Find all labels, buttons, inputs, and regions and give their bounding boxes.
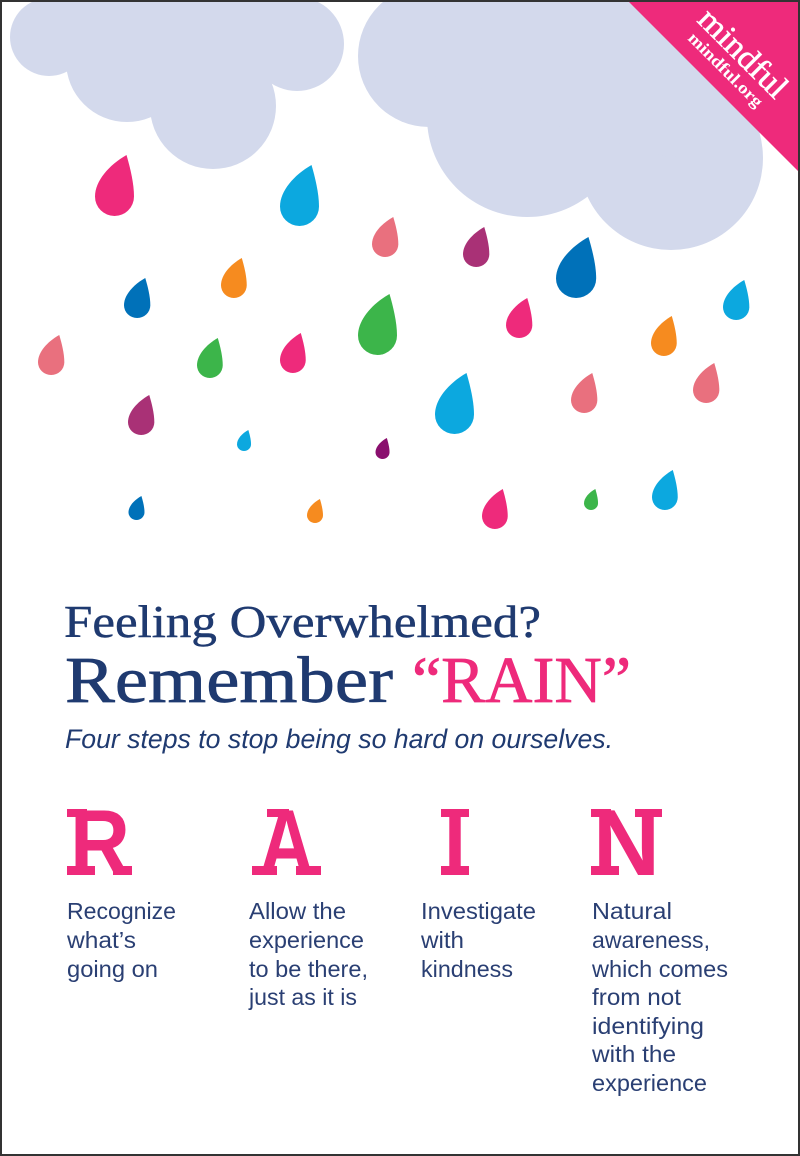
step I bbox=[420, 790, 536, 982]
letter A: A bbox=[259, 790, 314, 895]
text N: experience bbox=[592, 1070, 707, 1096]
text N: awareness, bbox=[592, 927, 710, 953]
text N: which comes bbox=[591, 956, 728, 982]
drop: cyan small bbox=[237, 430, 251, 451]
drop: cyan bbox=[723, 280, 749, 320]
step N bbox=[591, 790, 728, 1096]
banner url: mindful.org bbox=[684, 28, 767, 112]
drop: cyan large bbox=[435, 373, 474, 434]
heading line 2: Remember bbox=[65, 644, 393, 717]
drop: pink bbox=[280, 333, 306, 373]
text A: to be there, bbox=[249, 956, 368, 982]
text I: kindness bbox=[421, 956, 513, 982]
drop: plum bbox=[463, 227, 489, 267]
drop: pink large bbox=[95, 155, 134, 216]
drop: blue large bbox=[556, 237, 596, 298]
text R: Recognize bbox=[67, 898, 176, 924]
step A bbox=[248, 790, 368, 1010]
drop: pink bbox=[482, 489, 508, 529]
drop: salmon bbox=[372, 217, 398, 257]
drop: cyan large bbox=[280, 165, 319, 226]
text R: going on bbox=[67, 956, 158, 982]
text A: experience bbox=[249, 927, 364, 953]
raindrops bbox=[38, 155, 749, 529]
letter R: R bbox=[70, 790, 130, 895]
drop: salmon bbox=[38, 335, 64, 375]
letter N: N bbox=[593, 790, 660, 895]
text R: what’s bbox=[66, 927, 136, 953]
drop: orange bbox=[221, 258, 247, 298]
text I: Investigate bbox=[421, 898, 536, 924]
banner logo: mindful bbox=[690, 1, 795, 106]
drop: salmon bbox=[571, 373, 597, 413]
step R bbox=[66, 790, 176, 982]
drop: salmon bbox=[693, 363, 719, 403]
heading RAIN in quotes: “RAIN” bbox=[412, 644, 631, 717]
cloud: left bbox=[10, 0, 344, 169]
text N: from not bbox=[592, 984, 682, 1010]
drop: blue bbox=[124, 278, 150, 318]
text I: with bbox=[420, 927, 464, 953]
drop: green small bbox=[584, 489, 598, 510]
drop: plum bbox=[128, 395, 154, 435]
heading line 2 bbox=[65, 644, 631, 717]
drop: blue small bbox=[128, 496, 144, 520]
drop: pink bbox=[506, 298, 532, 338]
drop: cyan bbox=[652, 470, 678, 510]
drop: orange bbox=[651, 316, 677, 356]
text N: Natural bbox=[592, 898, 672, 924]
drop: green large bbox=[358, 294, 397, 355]
drop: purple small bbox=[376, 438, 390, 459]
subtitle: Four steps to stop being so hard on ourselves. bbox=[65, 724, 613, 754]
letter I: I bbox=[444, 790, 466, 895]
text N: with the bbox=[591, 1041, 676, 1067]
drop: orange small bbox=[307, 499, 323, 523]
cloud: right bbox=[358, 0, 763, 250]
text N: identifying bbox=[592, 1013, 704, 1039]
drop: green bbox=[197, 338, 223, 378]
text A: Allow the bbox=[249, 898, 346, 924]
heading line 1: Feeling Overwhelmed? bbox=[64, 596, 541, 647]
text A: just as it is bbox=[248, 984, 357, 1010]
corner banner: mindful bbox=[627, 0, 800, 173]
